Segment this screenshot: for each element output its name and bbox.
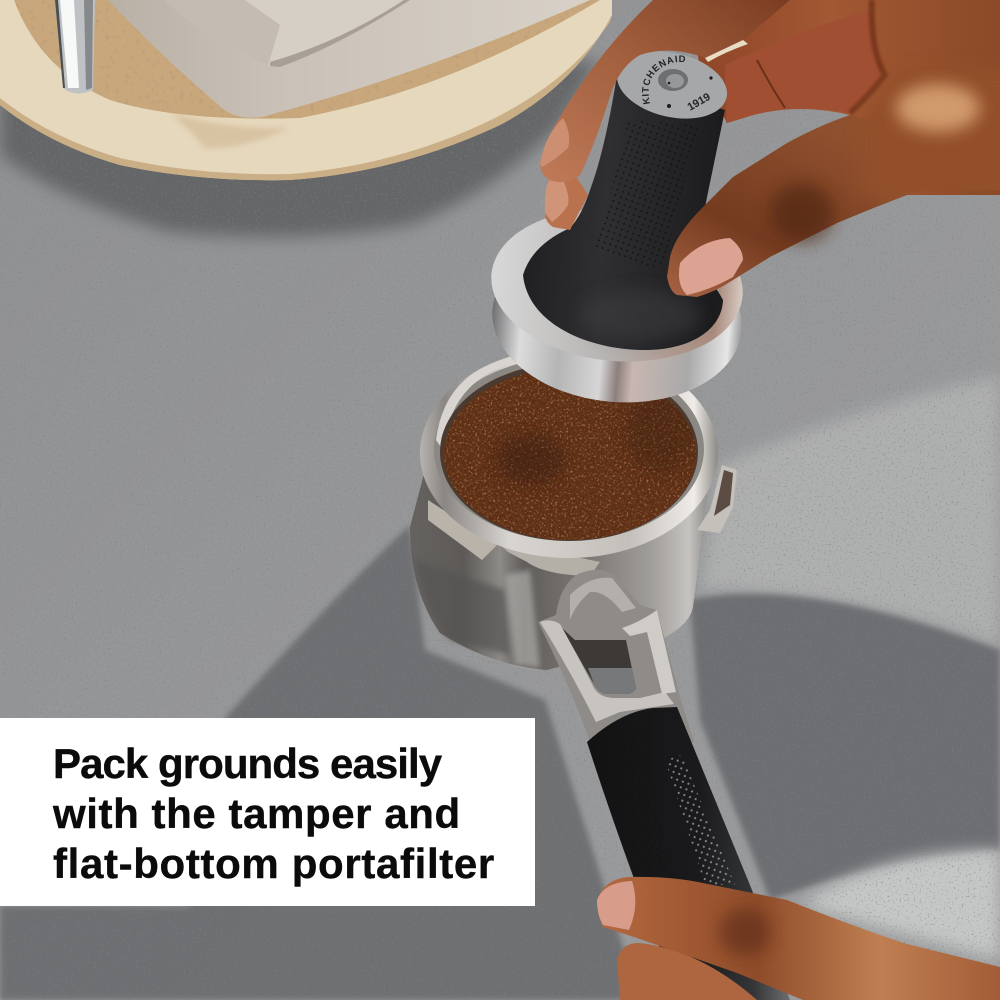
upper hand: index and second fingers	[540, 0, 790, 230]
front lug	[495, 540, 600, 576]
neck opening	[562, 628, 636, 694]
neck highlights	[540, 620, 674, 722]
glass object at top left	[55, 0, 95, 94]
portafilter basket body	[410, 470, 710, 670]
portafilter handle	[587, 707, 790, 1000]
lower thumbnail	[597, 881, 635, 930]
thumbnail	[679, 238, 743, 295]
caption text: with the tamper and	[53, 790, 461, 837]
tray rim	[0, 0, 612, 180]
caption text: Pack grounds easily	[53, 740, 441, 787]
caption text	[52, 740, 495, 887]
lower index finger	[597, 877, 1000, 1000]
tray sliver gap	[705, 40, 748, 62]
tamper top cap	[610, 41, 734, 129]
lower second finger	[617, 943, 757, 1000]
tamper perforation	[590, 120, 705, 270]
lower hand	[597, 877, 1000, 1000]
tamper year: 1919	[686, 91, 713, 114]
caption panel	[0, 718, 535, 906]
handle perforation highlight	[665, 755, 735, 885]
lower knuckle	[719, 908, 771, 956]
second finger	[545, 175, 588, 230]
portafilter	[410, 348, 790, 1000]
tamper	[491, 52, 743, 402]
coffee grounds	[444, 373, 696, 540]
index finger	[540, 0, 790, 182]
tamper engraving: KITCHENAID	[642, 56, 686, 104]
folded towels	[108, 0, 590, 118]
caption text: flat-bottom portafilter	[53, 840, 495, 887]
upper hand: palm behind tamper	[690, 0, 1000, 195]
tamper metal top	[485, 198, 749, 372]
tray well	[14, 0, 600, 119]
index fingernail	[540, 118, 569, 167]
right lug	[697, 465, 737, 533]
portafilter neck frame	[538, 570, 694, 742]
left lug	[428, 500, 497, 560]
thumb	[667, 70, 1000, 297]
basket rim	[420, 348, 718, 558]
knuckle wrinkles	[770, 183, 834, 243]
tray with linen towels	[0, 0, 620, 180]
tamper metal side	[485, 227, 749, 413]
back of hand blend and highlight	[868, 75, 994, 203]
tamper dark body	[523, 75, 725, 350]
